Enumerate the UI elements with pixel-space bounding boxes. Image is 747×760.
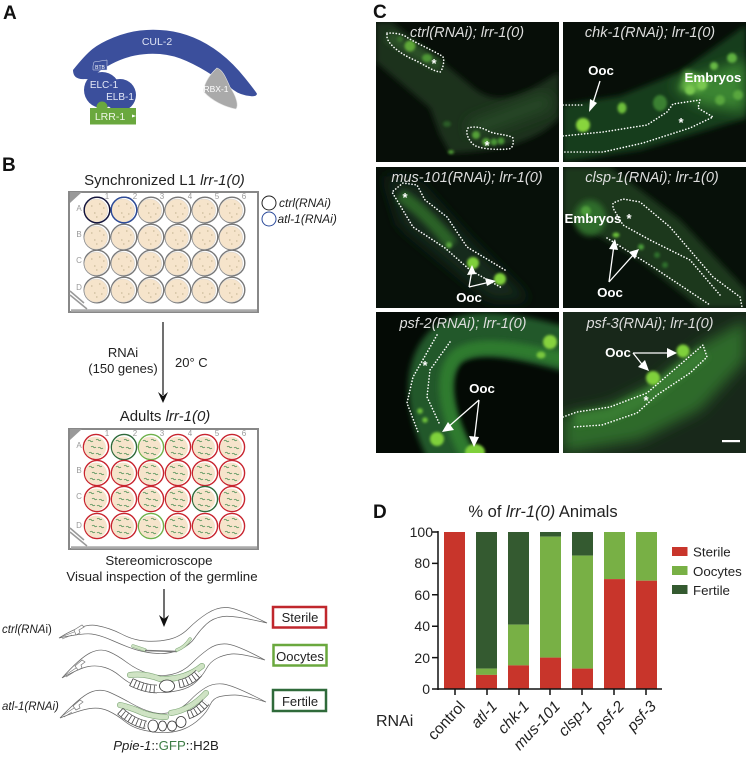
annotations <box>588 66 741 123</box>
box: sterile: Sterile <box>282 610 318 625</box>
germline outlines <box>607 199 742 307</box>
label: chk-1(RNAi); lrr-1(0) <box>585 25 715 41</box>
box: oocytes: Oocytes <box>276 649 324 664</box>
annotations: Embryos <box>685 70 741 85</box>
x axis labels: chk-1 <box>495 698 533 737</box>
axis title: RNAi: RNAi <box>376 713 413 730</box>
arrow: inspection step <box>159 589 169 627</box>
plate: scored adult plate: B <box>76 466 82 475</box>
ELC-1 and ELB-1 subunits: ELB-1 <box>106 92 134 103</box>
LRR-1 subunit <box>90 102 136 124</box>
bar: psf-3 <box>636 532 657 689</box>
asterisks: * <box>484 138 490 153</box>
micrograph: psf-3 <box>563 312 746 453</box>
label: ctrl(RNAi); lrr-1(0) <box>410 25 524 41</box>
arrow: RNAi step <box>158 322 168 403</box>
panel label C: C <box>373 2 387 23</box>
legend: ctrl and atl-1 wells: atl-1(RNAi) <box>278 212 337 226</box>
plate: scored adult plate: 1 <box>105 429 110 438</box>
x axis labels: control <box>425 698 469 744</box>
panel label B: B <box>2 155 16 176</box>
legend: phenotype: Sterile <box>693 544 731 560</box>
ELC-1 and ELB-1 subunits: ELC-1 <box>90 80 119 91</box>
y axis labels: 20 <box>414 650 430 666</box>
chart title: % of lrr-1(0) Animals <box>468 503 618 521</box>
text: stereomicroscope: Visual inspection of the germline <box>66 569 258 584</box>
plate: 24-well RNAi plate: C <box>76 256 82 265</box>
RBX-1 subunit: RBX-1 <box>203 84 229 94</box>
x axis labels: clsp-1 <box>555 698 596 740</box>
annotations <box>402 190 496 305</box>
plate: 24-well RNAi plate: 5 <box>215 192 220 201</box>
label: psf-3(RNAi); lrr-1(0) <box>585 316 714 332</box>
worm: sterile <box>59 607 267 654</box>
legend: ctrl and atl-1 wells <box>262 196 337 226</box>
micrograph: mus-101 <box>376 167 559 308</box>
germline outlines <box>387 33 513 149</box>
y axis labels <box>410 524 433 697</box>
annotations: * <box>626 211 632 226</box>
bar: atl-1 <box>476 532 497 689</box>
box: sterile <box>273 607 326 628</box>
text: stereomicroscope: Stereomicroscope <box>105 553 213 568</box>
annotations: Ooc <box>588 63 614 78</box>
annotations <box>422 358 495 447</box>
annotations: Ooc <box>469 381 495 396</box>
box: fertile: Fertile <box>282 694 318 709</box>
text: RNAi conditions: (150 genes) <box>88 361 158 376</box>
annotations: Embryos <box>565 211 621 226</box>
plate: scored adult plate: D <box>76 521 82 530</box>
scale bar <box>722 440 740 442</box>
x axis labels: psf-2 <box>591 698 628 736</box>
bar: chk-1 <box>508 532 529 689</box>
plate: 24-well RNAi plate: 3 <box>160 192 165 201</box>
legend: phenotype <box>672 544 742 598</box>
y axis labels: 80 <box>414 555 430 571</box>
CUL-2 subunit: CUL-2 <box>142 36 172 48</box>
bar: psf-2 <box>604 532 625 689</box>
y axis labels: 60 <box>414 587 430 603</box>
plate: 24-well RNAi plate: 1 <box>105 192 110 201</box>
box: oocytes <box>274 645 326 666</box>
text: RNAi conditions: RNAi <box>108 345 138 360</box>
annotations: * <box>678 115 684 130</box>
text: RNAi conditions: 20° C <box>175 355 208 370</box>
germline outlines <box>392 183 505 288</box>
bar: mus-101 <box>540 532 561 689</box>
labels: worm conditions <box>2 624 59 713</box>
plate: scored adult plate: C <box>76 492 82 501</box>
annotations: * <box>402 190 408 205</box>
RBX-1 subunit <box>203 68 237 109</box>
annotations <box>606 348 677 401</box>
plate: scored adult plate <box>69 429 258 549</box>
plate: scored adult plate: A <box>76 441 82 450</box>
x axis labels: psf-3 <box>623 698 660 736</box>
plate: 24-well RNAi plate: A <box>76 204 82 213</box>
x axis labels: mus-101 <box>510 698 564 754</box>
LRR-1 subunit: LRR-1 <box>95 111 125 123</box>
ELC-1 and ELB-1 subunits: BTB <box>95 65 106 71</box>
bar: clsp-1 <box>572 532 593 689</box>
labels: worm conditions: atl-1(RNAi) <box>2 701 59 713</box>
y axis labels: 0 <box>422 681 430 697</box>
heading: adults: Adults lrr-1(0) <box>120 408 210 425</box>
asterisks <box>432 59 490 146</box>
micrograph: chk-1 <box>563 22 746 162</box>
plate: 24-well RNAi plate: D <box>76 283 82 292</box>
plate: 24-well RNAi plate: B <box>76 230 82 239</box>
micrograph: ctrl <box>376 22 559 162</box>
panel label D: D <box>373 502 387 523</box>
CUL-2 subunit <box>73 30 257 96</box>
label: clsp-1(RNAi); lrr-1(0) <box>585 170 719 186</box>
germline outlines <box>563 345 707 427</box>
panel A: ubiquitin ligase complex <box>73 30 257 124</box>
text: stereomicroscope <box>66 553 258 584</box>
plate: scored adult plate: 5 <box>215 429 220 438</box>
x axis labels <box>425 698 660 754</box>
labels: worm conditions: ctrl(RNAi) <box>2 624 52 636</box>
germline outlines <box>407 335 450 432</box>
text: RNAi conditions <box>88 345 208 376</box>
plate: 24-well RNAi plate: 2 <box>133 192 138 201</box>
asterisks: * <box>431 56 437 71</box>
legend: phenotype: Fertile <box>693 583 730 598</box>
label: psf-2(RNAi); lrr-1(0) <box>398 316 527 332</box>
worm: fertile <box>60 684 266 733</box>
x axis labels: atl-1 <box>468 698 501 732</box>
plate: scored adult plate: 3 <box>160 429 165 438</box>
panel label A: A <box>3 3 17 24</box>
annotations: Ooc <box>597 285 623 300</box>
plate: 24-well RNAi plate <box>69 192 258 312</box>
caption: reporter: Ppie-1::GFP::H2B <box>113 738 219 753</box>
label: mus-101(RNAi); lrr-1(0) <box>391 170 543 186</box>
y axis labels: 100 <box>410 524 433 540</box>
ELC-1 and ELB-1 subunits <box>84 60 136 111</box>
plate: scored adult plate: 6 <box>242 429 247 438</box>
annotations: * <box>643 393 649 408</box>
heading: synchronized L1: Synchronized L1 lrr-1(0) <box>84 172 245 189</box>
annotations: Ooc <box>605 345 631 360</box>
legend: phenotype: Oocytes <box>693 564 742 579</box>
plate: 24-well RNAi plate: 4 <box>188 192 193 201</box>
axes <box>432 531 662 695</box>
annotations: * <box>422 358 428 373</box>
worm: oocytes <box>62 644 265 693</box>
bar: control <box>444 532 465 689</box>
plate: scored adult plate: 4 <box>188 429 193 438</box>
micrograph: clsp-1 <box>563 167 746 308</box>
stacked bar chart <box>410 524 662 754</box>
micrograph: psf-2 <box>376 312 559 453</box>
y axis labels: 40 <box>414 618 430 634</box>
plate: 24-well RNAi plate: 6 <box>242 192 247 201</box>
annotations <box>565 211 639 300</box>
germline outlines <box>563 100 713 152</box>
annotations: Ooc <box>456 290 482 305</box>
plate: scored adult plate: 2 <box>133 429 138 438</box>
box: fertile <box>273 690 326 711</box>
legend: ctrl and atl-1 wells: ctrl(RNAi) <box>279 196 331 210</box>
